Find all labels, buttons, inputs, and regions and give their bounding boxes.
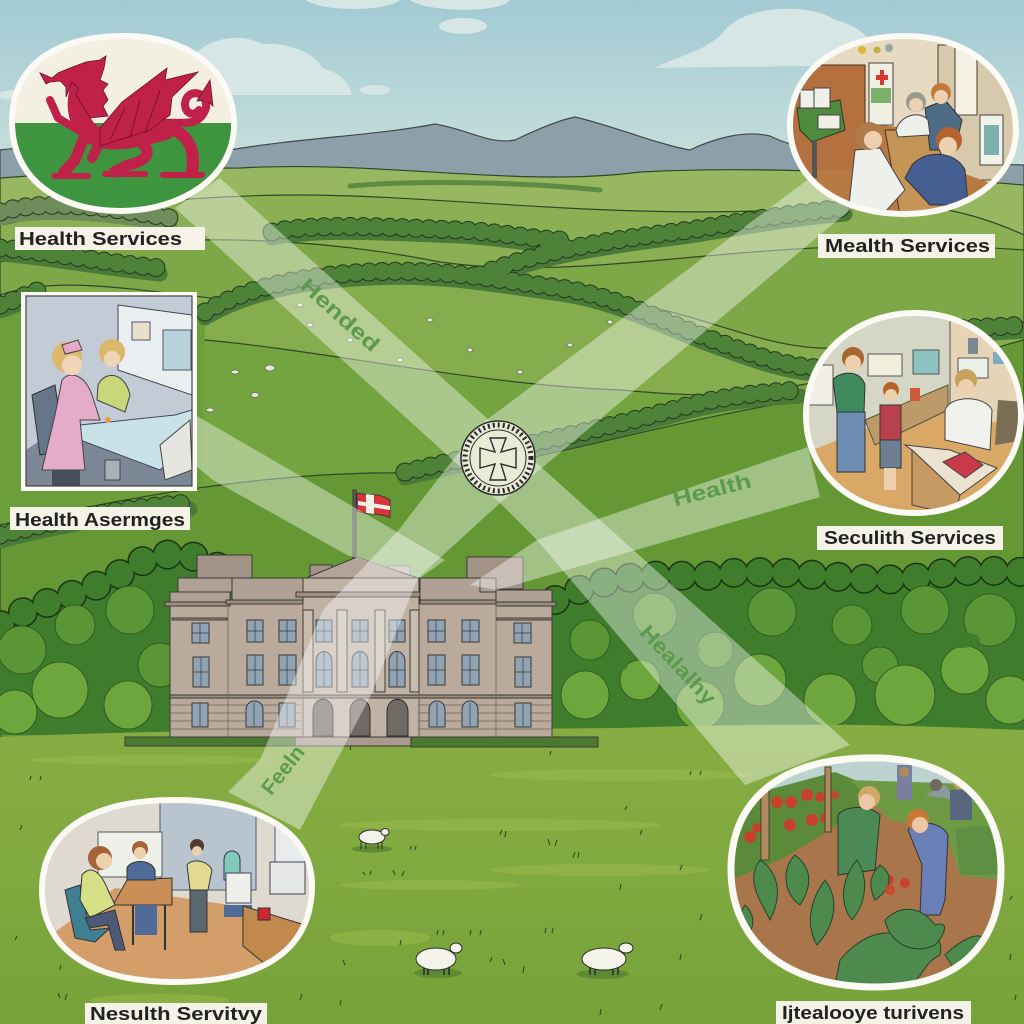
rusticated base bbox=[170, 604, 552, 737]
vegetables bbox=[740, 855, 985, 985]
floor bbox=[808, 125, 989, 211]
card: community garden bbox=[725, 750, 1010, 995]
tree lines bbox=[0, 183, 1024, 541]
beam label: Healalhy bbox=[635, 621, 720, 710]
mid hills bbox=[0, 195, 1024, 760]
window bbox=[118, 305, 192, 395]
seated doctor bbox=[848, 148, 905, 214]
head bbox=[40, 56, 108, 118]
meadow texture bbox=[30, 755, 750, 1006]
seated clinician bbox=[896, 115, 930, 137]
chart on wall bbox=[980, 115, 1003, 165]
child bbox=[880, 405, 901, 440]
gardener in blue bbox=[908, 823, 948, 915]
arched doors bbox=[313, 699, 408, 736]
grass tufts bbox=[15, 746, 1016, 1015]
beam: surgery to hall bbox=[470, 447, 820, 590]
light beams bbox=[175, 178, 852, 830]
floor bbox=[815, 412, 1014, 510]
standing worker bbox=[187, 861, 212, 890]
chair bbox=[995, 400, 1018, 445]
label: Mealth Services bbox=[825, 236, 990, 256]
background figures bbox=[897, 765, 912, 800]
wing roofs bbox=[170, 578, 552, 606]
gardener in apron bbox=[838, 808, 880, 875]
chair bbox=[65, 885, 110, 942]
posts bbox=[761, 785, 769, 860]
floor bbox=[56, 888, 262, 979]
sheep left bbox=[414, 943, 462, 978]
equipment bbox=[224, 851, 240, 880]
forest band behind building bbox=[0, 554, 1024, 735]
label bbox=[15, 227, 205, 250]
icons on top bbox=[858, 46, 866, 54]
beam label: Feeln bbox=[257, 741, 310, 799]
standing clinician bbox=[925, 100, 962, 150]
distant hills bbox=[0, 167, 1024, 400]
card: nurse and patient bbox=[21, 292, 197, 491]
foreground meadow bbox=[0, 725, 1024, 1024]
label: Health Services bbox=[19, 229, 182, 249]
table bbox=[884, 130, 944, 211]
main facade bbox=[170, 604, 552, 737]
sheep bbox=[352, 828, 633, 979]
bed chair bbox=[32, 384, 58, 456]
beam: clinic to office bbox=[228, 178, 852, 830]
icon: red dragon bbox=[40, 56, 213, 176]
tools bbox=[885, 885, 895, 895]
tail arrow bbox=[197, 80, 213, 106]
steps bbox=[295, 737, 411, 746]
label: Health Asermges bbox=[15, 510, 185, 530]
beam label: Health bbox=[671, 470, 754, 511]
window wall bbox=[160, 800, 256, 890]
cornices bbox=[165, 592, 556, 698]
sky bbox=[0, 0, 1024, 190]
doctor bbox=[945, 399, 992, 450]
right wall panel bbox=[938, 44, 1013, 180]
mountains bbox=[0, 117, 1024, 240]
card: Welsh flag bbox=[0, 30, 240, 218]
sheep far bbox=[352, 828, 392, 852]
pediment bbox=[306, 557, 418, 578]
seated worker bbox=[80, 870, 115, 918]
sheep on distant hill bbox=[206, 303, 613, 412]
door bbox=[793, 64, 866, 170]
table bbox=[113, 878, 172, 905]
sky strip bbox=[760, 755, 980, 790]
desk bbox=[905, 445, 997, 495]
hedge bbox=[125, 737, 598, 747]
neck and body bbox=[78, 78, 165, 139]
hall building bbox=[125, 490, 598, 747]
card: clinic consultation bbox=[785, 30, 1024, 220]
sheep right bbox=[577, 943, 633, 979]
green desk bbox=[797, 100, 845, 142]
windows bbox=[192, 620, 531, 727]
wing bbox=[100, 68, 198, 146]
window glazing bars bbox=[192, 620, 531, 727]
back shelf bbox=[865, 385, 948, 445]
flag on pole bbox=[353, 490, 390, 558]
floor bbox=[26, 442, 192, 486]
label: Nesulth Servitvy bbox=[90, 1004, 262, 1024]
wall posters bbox=[868, 354, 902, 376]
label bbox=[817, 526, 1003, 550]
card: surgery with family bbox=[800, 305, 1024, 520]
clouds bbox=[0, 0, 880, 100]
nurse bbox=[42, 375, 100, 470]
beam: nurse to hall bbox=[195, 415, 445, 578]
colleague back bbox=[127, 862, 155, 880]
cabinet bbox=[243, 906, 305, 968]
patient bbox=[905, 154, 968, 205]
central block bbox=[303, 578, 419, 737]
label: Ijtealooye turivens bbox=[782, 1003, 964, 1023]
label bbox=[818, 234, 995, 258]
patient bbox=[97, 375, 130, 412]
chimneys bbox=[197, 555, 523, 589]
card: open-plan office bbox=[38, 795, 320, 990]
beam: flag to garden bbox=[175, 178, 850, 785]
beam label: Hended bbox=[296, 274, 384, 357]
poster bbox=[869, 63, 893, 125]
parent bbox=[833, 373, 865, 412]
columns bbox=[303, 610, 419, 692]
bushes with tomatoes bbox=[730, 772, 880, 880]
central seal icon bbox=[461, 421, 535, 495]
bed bbox=[80, 410, 192, 470]
label: Seculith Services bbox=[824, 528, 996, 548]
